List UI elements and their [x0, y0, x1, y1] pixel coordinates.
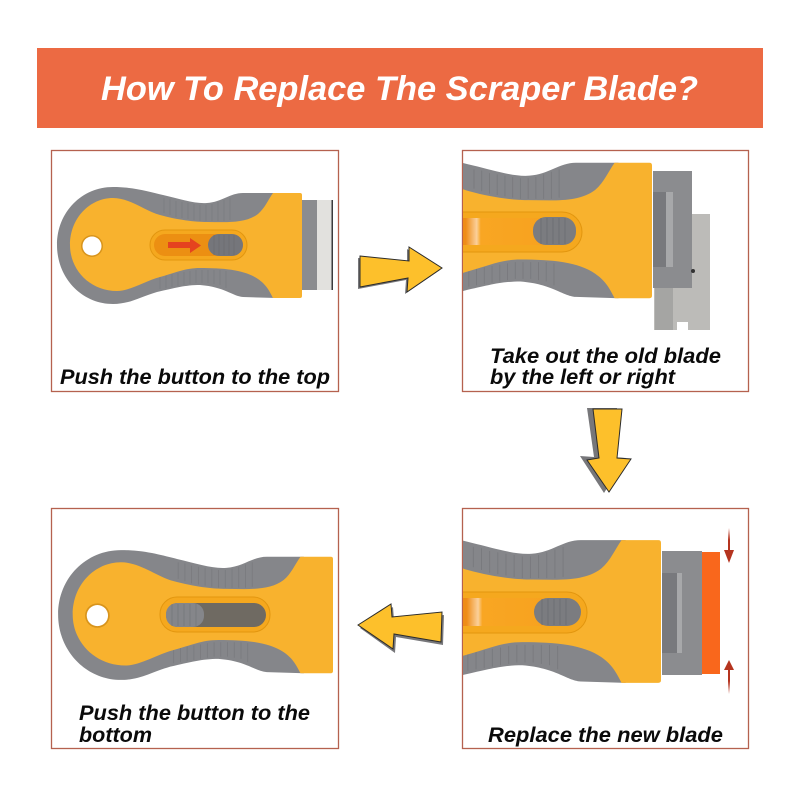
scraper tool, button back — [58, 550, 333, 680]
blade holder — [653, 171, 692, 288]
blade — [317, 200, 332, 290]
panel: step 2 take out old blade — [462, 150, 750, 392]
panel: step 4 push button to the bottom — [52, 508, 338, 748]
caption: Push the button to the — [79, 701, 310, 725]
panel: step 1 push button to the top — [52, 150, 338, 392]
scraper tool, button forward — [57, 187, 333, 304]
red direction arrow — [168, 238, 201, 253]
title banner — [37, 48, 763, 128]
title: How To Replace The Scraper Blade? — [101, 70, 698, 108]
scraper tool close-up — [463, 540, 720, 683]
panel: step 3 replace new blade — [462, 508, 750, 750]
blade holder — [302, 200, 317, 290]
old blade — [654, 214, 710, 330]
caption: Take out the old blade — [490, 344, 721, 368]
blade holder — [662, 551, 702, 675]
arrow: right — [358, 247, 442, 294]
caption: Push the button to the top — [60, 365, 330, 389]
panel: step 4 push button to the bottom: bottom — [79, 723, 152, 747]
caption: Replace the new blade — [488, 723, 723, 747]
red arrow down — [724, 528, 734, 563]
new orange blade — [702, 552, 720, 674]
panel: step 2 take out old blade: by the left or right — [490, 365, 676, 389]
arrow: down — [580, 408, 631, 493]
arrow: left — [358, 604, 444, 653]
scraper tool close-up — [463, 162, 710, 330]
red arrow up — [724, 660, 734, 694]
